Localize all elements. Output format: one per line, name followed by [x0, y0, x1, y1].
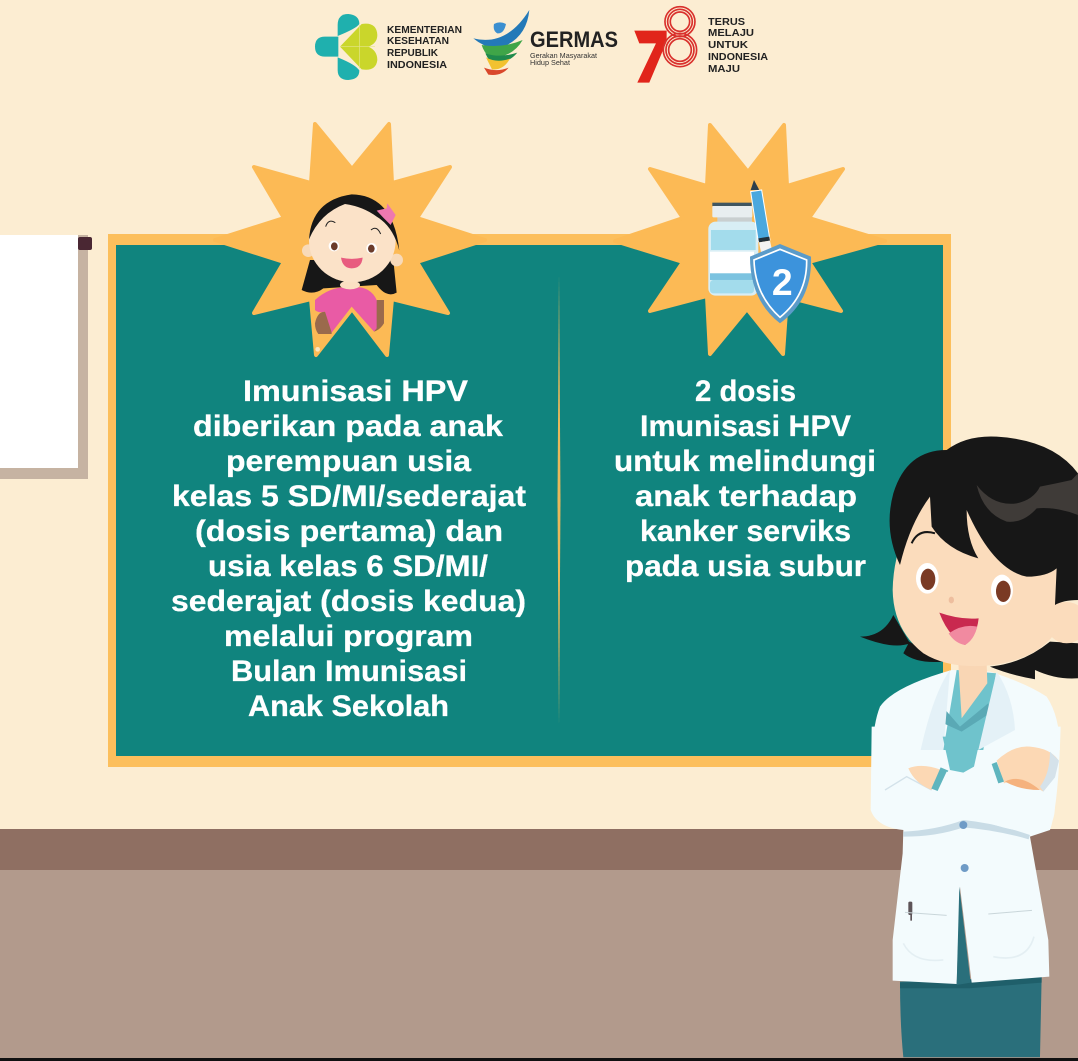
logo: GERMAS	[473, 10, 618, 75]
logo: GERMAS: Gerakan Masyarakat	[530, 53, 597, 60]
logo: Kementerian Kesehatan: INDONESIA	[387, 59, 447, 71]
text: left column: (dosis pertama) dan	[195, 515, 503, 548]
icon: girl	[302, 194, 403, 352]
starburst: left	[215, 124, 485, 355]
doctor lower coat and skirt	[871, 727, 1061, 1057]
icon: vaccine vial and syringe with shield: 2	[772, 261, 793, 303]
text: left column: perempuan usia	[226, 445, 471, 478]
text: left column: usia kelas 6 SD/MI/	[208, 550, 489, 583]
text: right column: untuk melindungi	[614, 445, 876, 478]
text: left column: Anak Sekolah	[248, 690, 449, 723]
logo: 78 Terus Melaju: UNTUK	[708, 39, 748, 51]
text: left column: diberikan pada anak	[193, 410, 503, 443]
logo: 78 Terus Melaju: INDONESIA	[708, 51, 768, 63]
icon: vaccine vial and syringe with shield	[708, 180, 811, 323]
text: left column	[171, 375, 526, 723]
logo: Kementerian Kesehatan: REPUBLIK	[387, 47, 438, 59]
text: left column: Imunisasi HPV	[243, 375, 468, 408]
text: right column: kanker serviks	[640, 515, 851, 548]
text: left column: kelas 5 SD/MI/sederajat	[172, 480, 526, 513]
doctor head and upper coat	[860, 436, 1078, 750]
doctor crossed arms and hands	[885, 737, 1059, 831]
logo: GERMAS: Hidup Sehat	[530, 60, 570, 67]
text: right column: Imunisasi HPV	[640, 410, 851, 443]
chalkboard	[108, 234, 951, 767]
logo: Kementerian Kesehatan: KEMENTERIAN	[387, 24, 462, 36]
text: right column	[614, 375, 876, 583]
text: right column: pada usia subur	[625, 550, 866, 583]
logo: 78 Terus Melaju: MELAJU	[708, 27, 754, 39]
text: left column: melalui program	[224, 620, 473, 653]
starburst: right	[615, 125, 885, 354]
logo: 78 Terus Melaju: TERUS	[708, 16, 745, 28]
illustration: doctor	[860, 436, 1078, 1057]
text: left column: sederajat (dosis kedua)	[171, 585, 526, 618]
paper on wall	[0, 235, 92, 479]
logo: Kementerian Kesehatan: KESEHATAN	[387, 35, 449, 47]
logo: 78 Terus Melaju: MAJU	[708, 63, 740, 75]
logo: Kementerian Kesehatan	[315, 14, 462, 80]
text: left column: Bulan Imunisasi	[231, 655, 467, 688]
text: right column: 2 dosis	[695, 375, 796, 408]
logo: GERMAS: GERMAS	[530, 27, 618, 52]
logo: 78 Terus Melaju	[634, 7, 768, 83]
text: right column: anak terhadap	[635, 480, 857, 513]
